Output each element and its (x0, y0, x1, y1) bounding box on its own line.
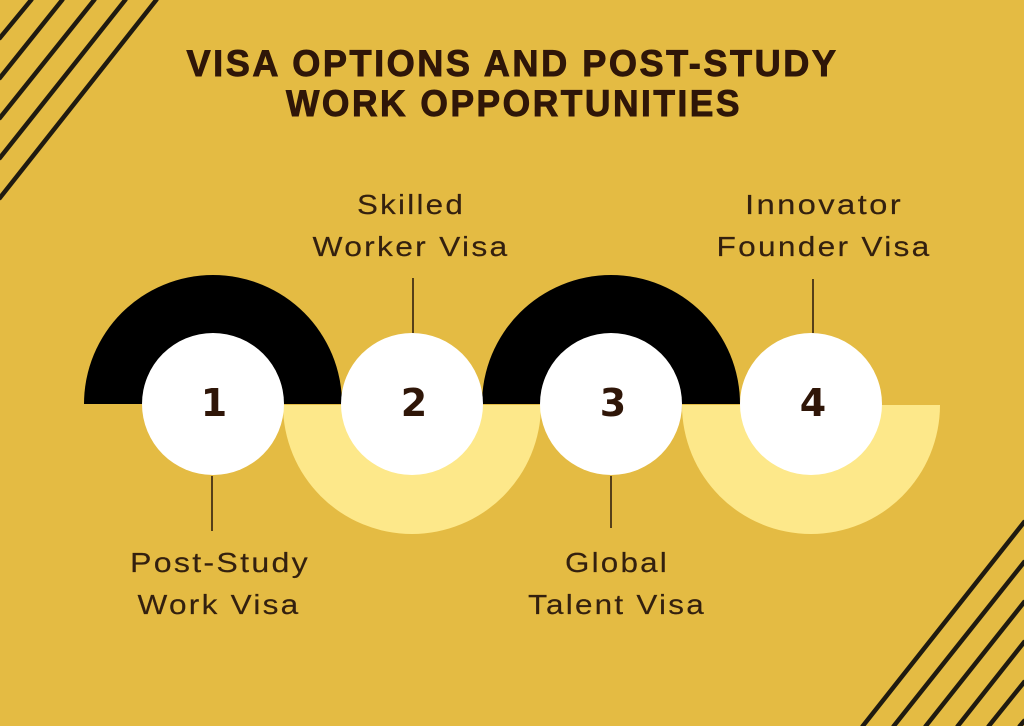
title (186, 43, 838, 124)
step 4: 4 (800, 381, 826, 425)
light arch 4 (682, 405, 940, 534)
step 4: Founder Visa (716, 231, 932, 262)
step 2: Worker Visa (312, 231, 510, 262)
black arch 1 (84, 275, 342, 404)
step 3: Global (565, 547, 669, 578)
step 2: 2 (401, 381, 427, 425)
decorative stripes: top left (0, 0, 157, 199)
title: WORK OPPORTUNITIES (286, 83, 742, 124)
step 1: Work Visa (138, 589, 300, 620)
black arch 3 (482, 275, 740, 404)
step 2 (312, 189, 510, 475)
step 1: Post-Study (130, 547, 310, 578)
step 3: 3 (600, 381, 626, 425)
step 2: Skilled (357, 189, 465, 220)
step 4 (716, 189, 932, 475)
light arch 2 (283, 405, 541, 534)
title: VISA OPTIONS AND POST-STUDY (186, 43, 838, 84)
step 1: 1 (201, 381, 227, 425)
step 1 (130, 333, 310, 620)
step 4: Innovator (745, 189, 903, 220)
step 3 (528, 333, 706, 620)
decorative stripes: bottom right (862, 521, 1024, 726)
step 3: Talent Visa (528, 589, 706, 620)
